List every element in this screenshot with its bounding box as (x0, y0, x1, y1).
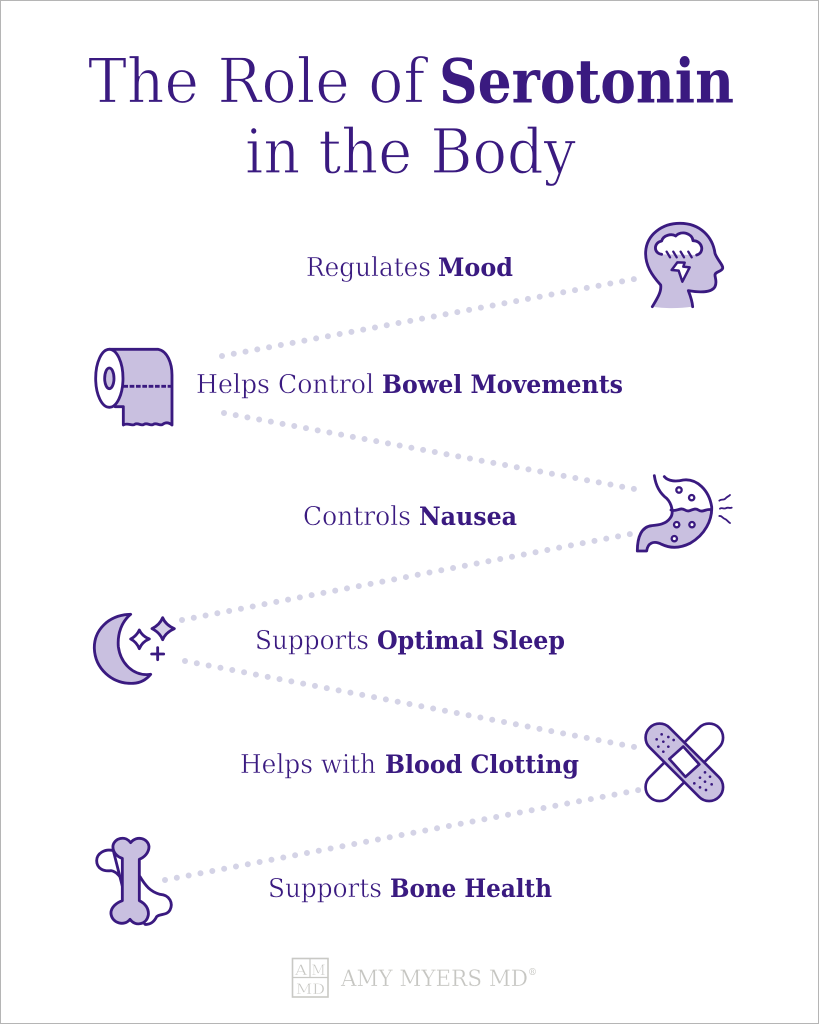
label: nausea: Controls (303, 502, 411, 532)
logo mark: M (312, 963, 326, 979)
logo mark: MD (296, 982, 325, 998)
label: bowel movements: Helps Control (196, 370, 374, 400)
dotted connector lines (165, 279, 638, 880)
label: regulates mood: Mood (438, 253, 513, 282)
label: nausea (303, 502, 517, 532)
title: in the Body (245, 116, 576, 188)
label: bone health (268, 874, 552, 904)
label: blood clotting: Blood Clotting (385, 750, 579, 779)
icon: moon and stars (94, 614, 174, 683)
title: Serotonin (439, 46, 734, 118)
icon: crossed bandages (640, 718, 729, 807)
label: blood clotting (240, 750, 579, 780)
label: optimal sleep: Optimal Sleep (377, 626, 565, 655)
logo mark (292, 958, 328, 998)
icon: crossed bones (97, 838, 171, 924)
label: regulates mood: Regulates (306, 253, 431, 283)
logo mark: A (294, 963, 308, 979)
label: nausea: Nausea (419, 502, 517, 531)
registered mark: ® (528, 968, 537, 978)
label: bowel movements: Bowel Movements (382, 370, 623, 399)
label: optimal sleep: Supports (255, 626, 369, 656)
logo: amy myers md (292, 958, 537, 998)
label: bone health: Supports (268, 874, 382, 904)
icon: toilet paper roll (96, 349, 172, 425)
label: bowel movements (196, 370, 623, 400)
title: The Role of (88, 46, 429, 118)
label: blood clotting: Helps with (240, 750, 376, 780)
logo wordmark: AMY MYERS MD (340, 967, 528, 992)
label: bone health: Bone Health (390, 874, 552, 903)
icon: stomach (637, 476, 732, 551)
label: regulates mood (306, 253, 513, 283)
label: optimal sleep (255, 626, 565, 656)
title (88, 46, 734, 188)
icon: head with storm cloud (646, 223, 723, 308)
